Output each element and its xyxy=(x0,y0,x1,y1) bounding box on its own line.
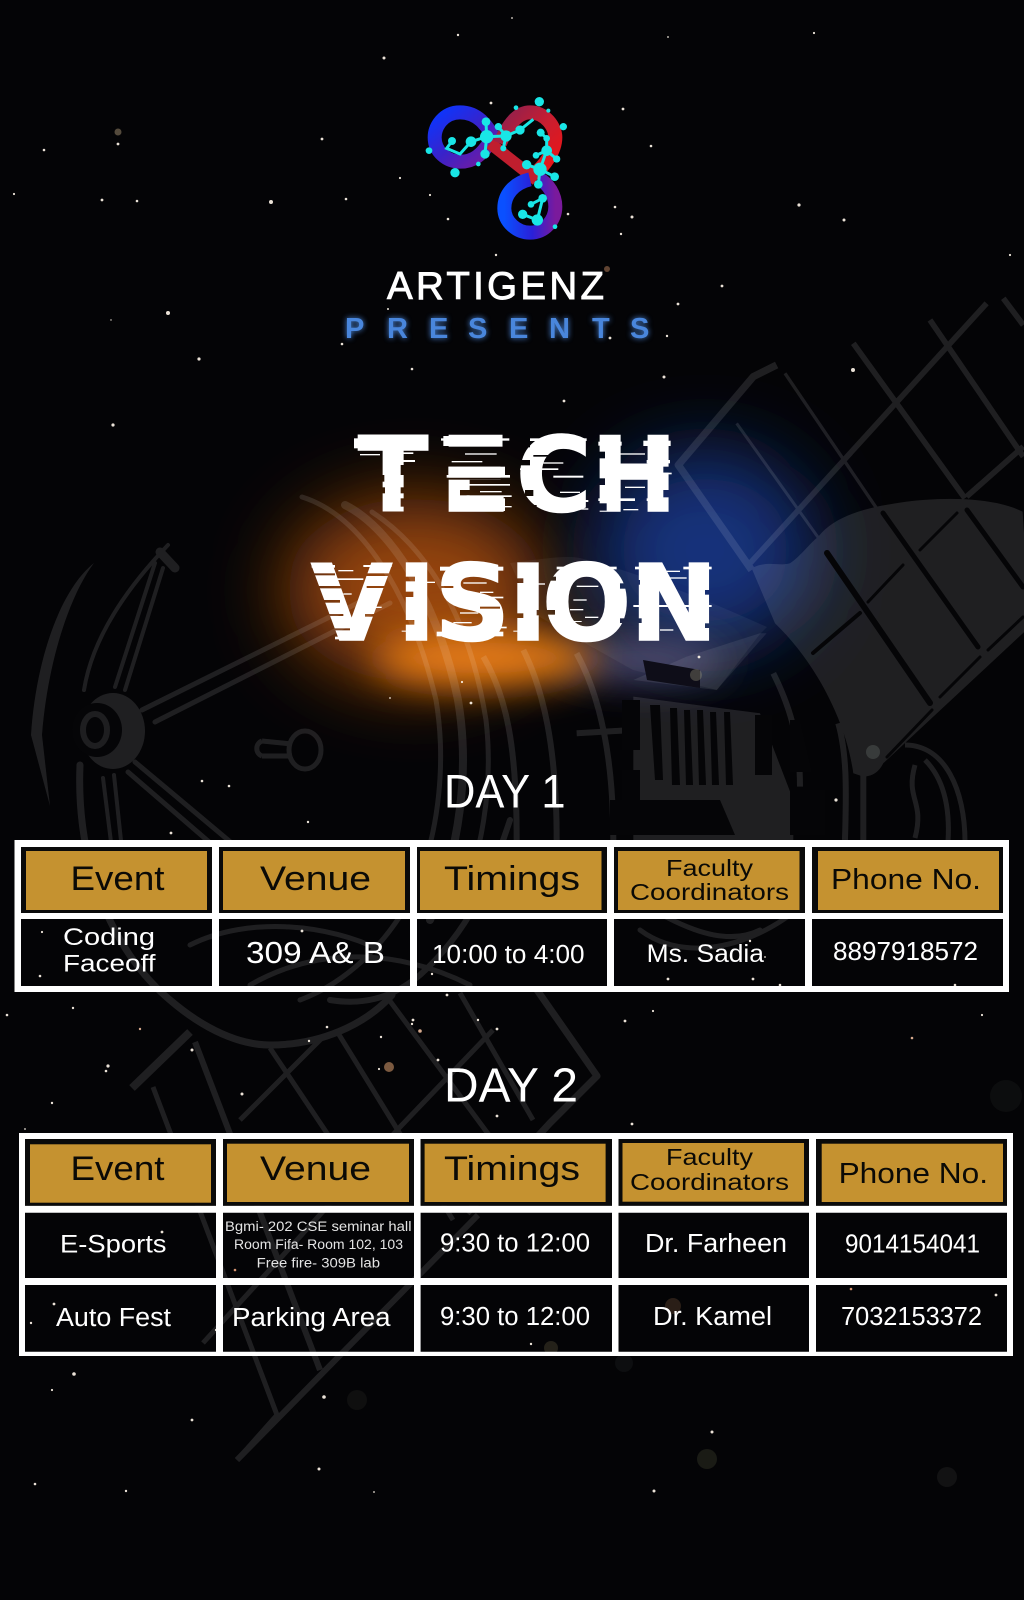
day 2 header row: Faculty xyxy=(666,1144,753,1170)
day 2 heading: DAY 2 xyxy=(444,1060,578,1113)
day 2 row: auto fest: 7032153372 xyxy=(841,1303,982,1331)
satellite dark cutouts xyxy=(72,510,1023,835)
day 2 table xyxy=(19,1133,1013,1356)
day 2 row: e-sports: Free fire- 309B lab xyxy=(257,1256,380,1271)
day 1 table frame xyxy=(14,840,1009,992)
day 2 header row: Timings xyxy=(444,1150,580,1188)
day 2 header row: Coordinators xyxy=(630,1169,789,1195)
day 1 heading: DAY 1 xyxy=(444,764,566,817)
logo molecule nodes xyxy=(426,97,567,229)
upper solar panel grid xyxy=(678,298,1023,570)
day 1 data row: 10:00 to 4:00 xyxy=(432,941,585,969)
body curved bands xyxy=(483,650,863,840)
hub rings xyxy=(83,714,107,746)
day 2 header row xyxy=(25,1139,1007,1206)
day 1 header row: Timings xyxy=(444,860,580,898)
nebula glow xyxy=(285,450,815,686)
day 2 row: auto fest: Dr. Kamel xyxy=(653,1303,772,1331)
title xyxy=(310,433,712,642)
day 1 table xyxy=(14,840,1009,992)
logo ribbon xyxy=(435,112,555,233)
day 2 row: e-sports: 9:30 to 12:00 xyxy=(440,1230,590,1258)
day 1 data row: 309 A& B xyxy=(246,936,385,970)
logo molecule bonds xyxy=(447,119,557,220)
day 2 row: e-sports xyxy=(60,1219,980,1271)
solar panel and body fill xyxy=(633,499,1024,847)
day 2 header row: Event xyxy=(70,1150,165,1188)
day 1 header row: Phone No. xyxy=(831,864,981,896)
day 2 header row: Phone No. xyxy=(839,1158,988,1190)
day 2 row: auto fest xyxy=(56,1303,982,1332)
day 2 row: e-sports: Room Fifa- Room 102, 103 xyxy=(234,1237,403,1252)
satellite line art xyxy=(31,298,1024,1460)
day 2 row: auto fest: Parking Area xyxy=(232,1304,391,1332)
small bolt xyxy=(257,731,321,769)
lower solar panel grid xyxy=(132,990,597,1460)
day 1 header row: Event xyxy=(70,860,165,898)
brand name: ARTIGENZ xyxy=(387,265,604,308)
day 2 row: e-sports: 9014154041 xyxy=(845,1231,980,1259)
title word: tech: TECH xyxy=(358,416,677,536)
day 1 data row: 8897918572 xyxy=(833,938,978,966)
day 2 header row: Venue xyxy=(260,1150,371,1188)
day 1 header row: Venue xyxy=(260,860,371,898)
day 1 data row: Faceoff xyxy=(63,951,156,978)
title word: vision xyxy=(310,560,712,642)
day 2 row: e-sports: Bgmi- 202 CSE seminar hall xyxy=(225,1219,412,1234)
day 1 data row: Ms. Sadia xyxy=(647,940,764,968)
day 1 data row xyxy=(63,924,978,978)
satellite light shapes xyxy=(31,298,1024,1460)
dish and rings xyxy=(31,497,840,1045)
right dome xyxy=(905,745,965,842)
title word: tech xyxy=(354,433,672,514)
day 2 table frame xyxy=(19,1133,1013,1356)
faint bokeh specks xyxy=(114,128,1022,1487)
title word: vision: VISION xyxy=(311,543,718,665)
body upper silhouette behind title xyxy=(510,557,767,690)
day 1 data row: Coding xyxy=(63,924,155,951)
day 1 header row xyxy=(21,847,1003,913)
day 1 header row: Faculty xyxy=(666,855,753,881)
day 2 row: e-sports: Dr. Farheen xyxy=(645,1230,787,1258)
logo xyxy=(426,97,567,233)
day 2 row: auto fest: Auto Fest xyxy=(56,1304,171,1332)
day 1 header row: Coordinators xyxy=(630,879,789,905)
presents: PRESENTS xyxy=(345,313,649,345)
day 2 row: e-sports: E-Sports xyxy=(60,1231,166,1259)
day 2 row: auto fest: 9:30 to 12:00 xyxy=(440,1303,590,1331)
